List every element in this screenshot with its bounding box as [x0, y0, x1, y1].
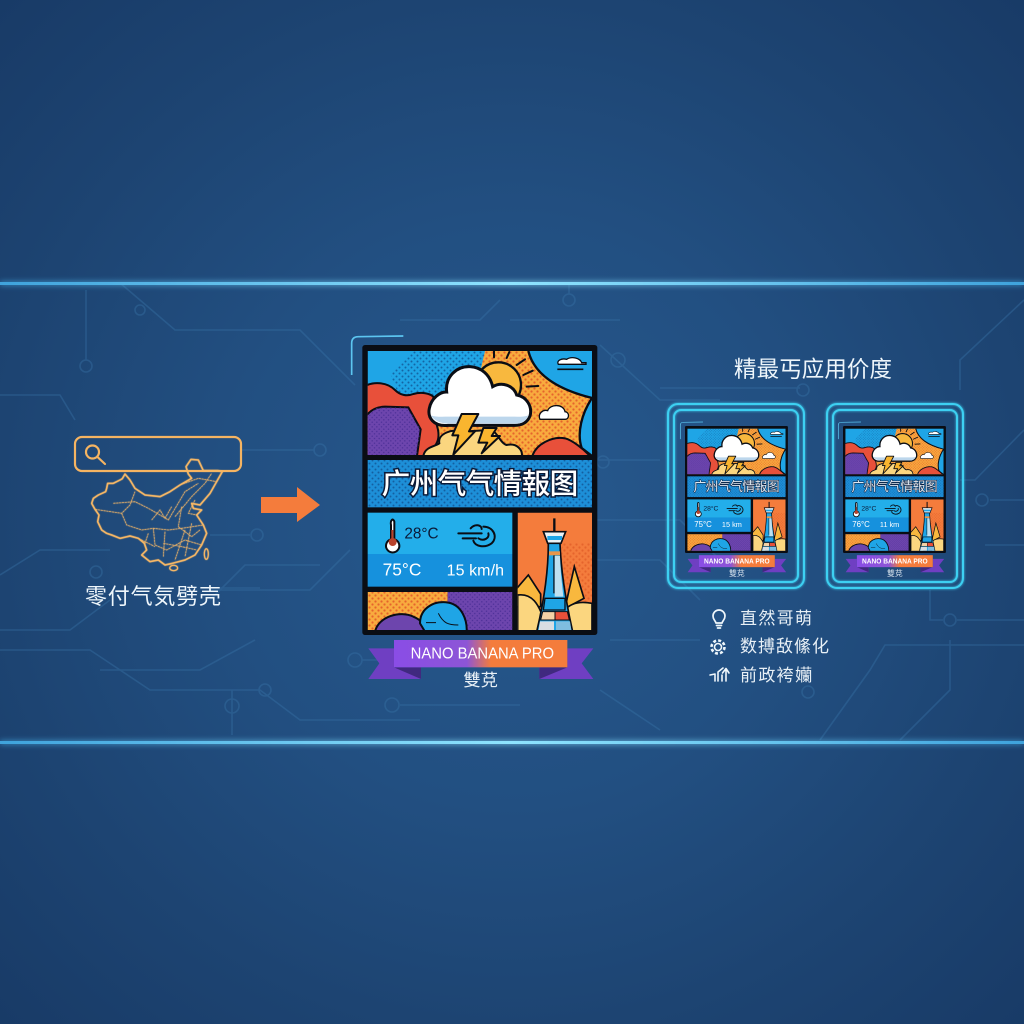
arrow — [261, 487, 320, 522]
panel: variant card 1 — [668, 404, 804, 588]
mini poster — [838, 422, 946, 579]
mini poster: 雙莌 — [887, 568, 903, 579]
mini poster: 广州气气情報图 — [693, 476, 780, 495]
card frame — [827, 404, 963, 588]
card frame — [668, 404, 804, 588]
benefit text 2: 数搏敌絛化 — [740, 632, 829, 657]
mini poster: NANO BANANA PRO — [862, 556, 928, 565]
ribbon caption: 雙莌 — [463, 666, 498, 691]
poster title: 广州气气情報图 — [382, 461, 578, 502]
icon: growth arrow — [710, 668, 729, 681]
bottom glowing divider line — [0, 741, 1024, 744]
mini poster: 11 km — [880, 520, 899, 529]
mini poster: 28°C — [703, 505, 719, 513]
humidity value: 75°C — [383, 560, 421, 580]
icon: magnifying glass — [86, 446, 105, 464]
mini poster: 75°C — [694, 520, 712, 529]
benefit text 3: 前政袴孏 — [740, 661, 812, 686]
mini poster: NANO BANANA PRO — [704, 556, 770, 565]
benefit text 1: 直然哥萌 — [740, 604, 812, 629]
search bar — [75, 437, 241, 471]
icon: gear — [712, 640, 724, 654]
mini poster — [680, 422, 788, 579]
temperature: 28°C — [404, 525, 439, 542]
panel: main poster — [352, 336, 597, 691]
poster artwork — [352, 336, 597, 679]
wind speed: 15 km/h — [447, 563, 504, 580]
mini poster: 广州气气情報图 — [851, 476, 938, 495]
list: benefits — [710, 604, 829, 686]
panel: search input — [75, 437, 241, 611]
mini poster: 28°C — [861, 505, 877, 513]
ribbon label: NANO BANANA PRO — [411, 646, 554, 663]
label: search caption: 零付气気劈壳 — [85, 579, 221, 611]
mini poster: 15 km — [722, 520, 742, 529]
top glowing divider line — [0, 282, 1024, 285]
mini poster: 76°C — [852, 520, 870, 529]
circuit board pattern — [0, 283, 1024, 740]
panel: variant card 2 — [827, 404, 963, 588]
map of China — [92, 459, 222, 571]
icon: light bulb — [713, 610, 725, 628]
mini poster: 雙莌 — [729, 568, 745, 579]
heading: value: 精最丐应用价度 — [734, 352, 892, 384]
